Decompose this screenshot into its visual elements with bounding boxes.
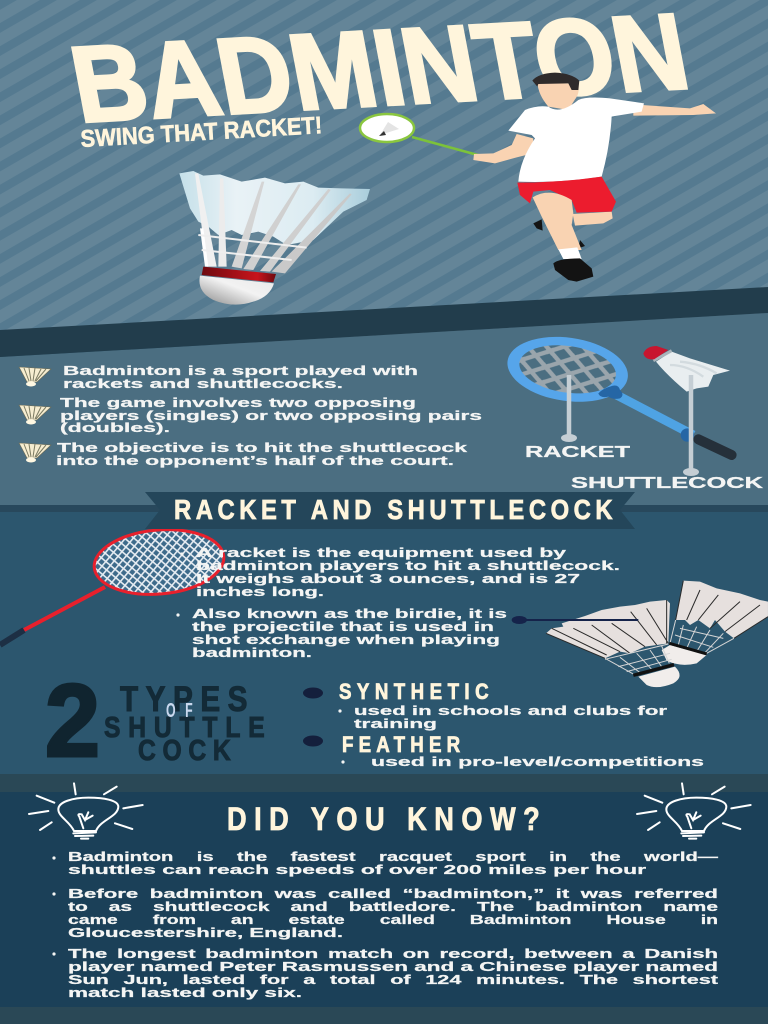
list: synthetic: training <box>354 717 437 731</box>
heading: 2 types of shuttlecock <box>45 663 265 778</box>
text: intro bullets: (doubles). <box>60 421 170 435</box>
panel: racket and shuttlecock <box>0 492 768 778</box>
callout: shuttlecock label <box>571 375 764 492</box>
text: racket description: inches long. <box>196 585 324 599</box>
text: fact 3: The longest badminton match on record, between a Danish <box>68 947 718 961</box>
icon: badminton player <box>473 73 716 282</box>
list: synthetic: used in schools and clubs for <box>354 704 667 718</box>
list: feather: FEATHER <box>342 734 460 757</box>
callout: shuttlecock label: SHUTTLECOCK <box>571 475 764 492</box>
heading ribbon: RACKET AND SHUTTLECOCK <box>174 493 613 525</box>
text: racket description <box>180 546 620 599</box>
heading: 2 types of shuttlecock: TYPES <box>120 680 248 719</box>
heading: 2 types of shuttlecock: COCK <box>138 734 231 766</box>
text: shuttlecock description <box>176 607 507 660</box>
text: intro bullets: players (singles) or two opposing pairs <box>60 409 482 423</box>
list: feather <box>303 734 704 769</box>
text: intro bullets: rackets and shuttlecocks. <box>63 377 343 391</box>
subtitle: SWING THAT RACKET! <box>80 112 323 153</box>
text: fact 3: Sun Jun, lasted for a total of 124 minutes. The shortest <box>68 973 719 987</box>
text: fact 2: Before badminton was called “badminton,” it was referred <box>68 887 718 901</box>
text: racket description: badminton players to hit a shuttlecock. <box>196 559 620 573</box>
text: shuttlecock description: shot exchange when playing <box>192 633 500 647</box>
list: synthetic <box>303 681 667 731</box>
text: fact 2: came from an estate called Badminton House in <box>68 913 718 927</box>
icon: player racket <box>360 114 496 160</box>
text: intro bullets: The objective is to hit the shuttlecock <box>57 441 467 455</box>
panel: did you know <box>0 774 768 1024</box>
icon: light bulb left <box>29 783 143 839</box>
text: fact 2 <box>52 887 718 940</box>
text: shuttlecock description: Also known as the birdie, it is <box>192 607 507 621</box>
list: feather: used in pro-level/competitions <box>371 755 704 769</box>
icon: small shuttlecock <box>643 346 730 392</box>
panel: introduction <box>0 287 768 505</box>
text: fact 3: player named Peter Rasmussen and a Chinese player named <box>68 960 718 974</box>
heading: 2 types of shuttlecock: 2 <box>45 663 100 778</box>
text: shuttlecock description: badminton. <box>192 646 312 660</box>
text: fact 1: Badminton is the fastest racquet sport in the world— <box>68 850 719 864</box>
callout: racket label: RACKET <box>525 444 631 461</box>
heading: did you know: DID YOU KNOW? <box>227 802 540 838</box>
text: racket description: It weighs about 3 ounces, and is 27 <box>196 572 580 586</box>
list: synthetic: SYNTHETIC <box>339 681 489 704</box>
text: fact 1: shuttles can reach speeds of over 200 miles per hour <box>68 863 646 877</box>
icon: bullet shuttle 3 <box>19 443 51 462</box>
text: intro bullets <box>56 364 482 468</box>
icon: bullet shuttle 1 <box>19 367 51 386</box>
text: intro bullets: Badminton is a sport played with <box>63 364 418 378</box>
heading: 2 types of shuttlecock: OF <box>166 699 193 722</box>
callout: racket label <box>525 375 631 461</box>
icon: red racket <box>0 524 227 645</box>
icon: blue racket <box>503 330 732 455</box>
text: fact 1 <box>52 850 719 877</box>
heading: 2 types of shuttlecock: SHUTTLE <box>104 711 265 743</box>
text: fact 3: match lasted only six. <box>68 986 302 1000</box>
icon: pair of shuttlecocks <box>512 581 768 687</box>
text: intro bullets: The game involves two opposing <box>60 396 416 410</box>
text: fact 2: Gloucestershire, England. <box>68 926 343 940</box>
dark diagonal band <box>0 287 768 357</box>
icon: light bulb right <box>637 783 751 839</box>
icon: bullet shuttle 2 <box>19 405 51 424</box>
text: racket description: A racket is the equipment used by <box>196 546 566 560</box>
icon: large shuttlecock <box>179 171 370 305</box>
text: intro bullets: into the opponent’s half of the court. <box>56 454 454 468</box>
text: shuttlecock description: the projectile that is used in <box>192 620 494 634</box>
text: fact 3 <box>52 947 719 1000</box>
text: fact 2: to as shuttlecock and battledore. The badminton name <box>68 900 718 914</box>
panel: hero header <box>0 0 768 345</box>
